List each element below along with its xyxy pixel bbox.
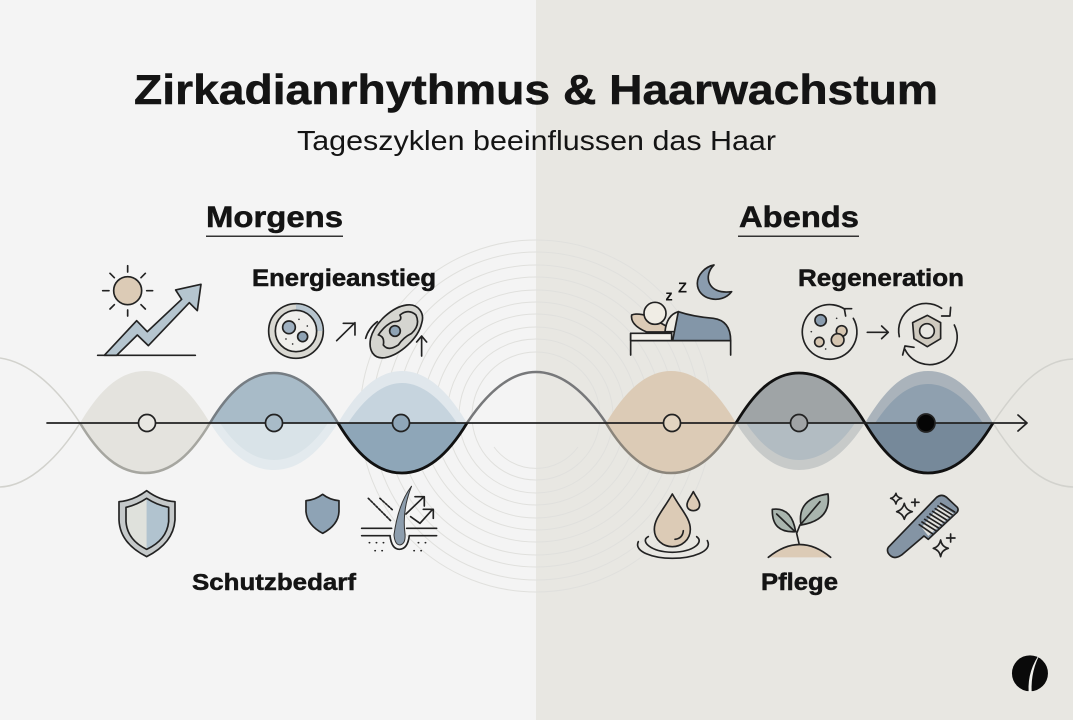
subtitle: Tageszyklen beeinflussen das Haar <box>297 125 776 156</box>
lobe fill: evening dark blue <box>865 371 993 473</box>
icon: hair follicle with arrows <box>362 486 437 551</box>
title: Zirkadianrhythmus & Haarwachstum <box>134 66 938 113</box>
heading: Morgens: Morgens <box>206 201 343 234</box>
lobe fill: evening grey <box>736 373 865 470</box>
wave line: faded ends <box>0 358 1073 487</box>
heading: Abends: Abends <box>739 201 859 234</box>
lobe fill: morning dark blue <box>338 371 467 473</box>
icon: sleeping person: Z <box>678 280 687 296</box>
icon: sun with rising arrow <box>98 266 201 355</box>
lobe fill: morning neutral <box>80 371 210 473</box>
logo <box>1012 652 1048 692</box>
icon: seedling <box>768 494 831 557</box>
icon: water drop <box>638 492 708 558</box>
label: Energieanstieg: Energieanstieg <box>252 265 436 292</box>
icon: large shield <box>119 491 175 557</box>
background: morning panel <box>0 0 536 720</box>
icon: comb with sparkles <box>887 493 958 557</box>
label: Pflege: Pflege <box>761 569 838 596</box>
icon: sleeping person: z <box>665 289 673 305</box>
concentric rings <box>360 240 712 592</box>
icon: small shield <box>306 494 339 533</box>
wave line segments <box>80 372 993 473</box>
time axis arrow <box>47 415 1027 431</box>
icon: sleeping person <box>631 265 732 355</box>
axis markers <box>138 414 935 432</box>
icon: cell to mitochondrion <box>269 304 427 358</box>
label: Schutzbedarf: Schutzbedarf <box>192 569 356 595</box>
background: evening panel <box>536 0 1073 720</box>
wave chart <box>0 358 1073 487</box>
icon: cellular debris to renewal <box>802 303 957 365</box>
label: Regeneration: Regeneration <box>798 265 964 292</box>
lobe fill: evening tan <box>606 371 736 473</box>
center lobe background <box>467 372 606 423</box>
lobe fill: morning blue <box>210 373 338 470</box>
